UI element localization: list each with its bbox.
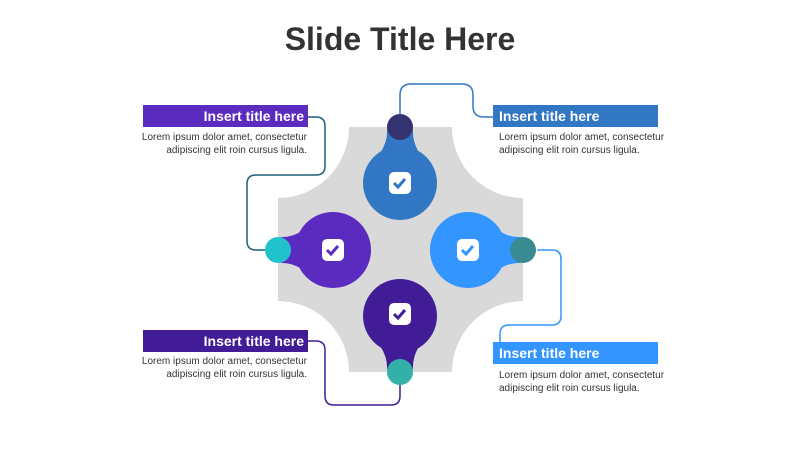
drop: top [363, 114, 437, 220]
text: adipiscing elit roin cursus ligula. [499, 145, 640, 156]
gray cross background [207, 56, 594, 443]
text: Lorem ipsum dolor amet, consectetur [142, 356, 307, 367]
text: adipiscing elit roin cursus ligula. [166, 145, 307, 156]
drop: right [430, 212, 536, 288]
text: adipiscing elit roin cursus ligula. [499, 383, 640, 394]
text block: bottom left [142, 330, 308, 380]
text: Insert title here [204, 333, 304, 349]
connector lines [247, 84, 561, 405]
drop: left [265, 212, 371, 288]
text: Insert title here [499, 108, 599, 124]
text: Lorem ipsum dolor amet, consectetur [142, 132, 307, 143]
text block: top right [493, 105, 664, 156]
title: Slide Title Here [285, 21, 515, 57]
text: Lorem ipsum dolor amet, consectetur [499, 370, 664, 381]
drop: bottom [363, 279, 437, 385]
text: Lorem ipsum dolor amet, consectetur [499, 132, 664, 143]
text: Insert title here [499, 345, 599, 361]
text: Insert title here [204, 108, 304, 124]
text block: top left [142, 105, 308, 156]
text block: bottom right [493, 342, 664, 394]
text: adipiscing elit roin cursus ligula. [166, 369, 307, 380]
